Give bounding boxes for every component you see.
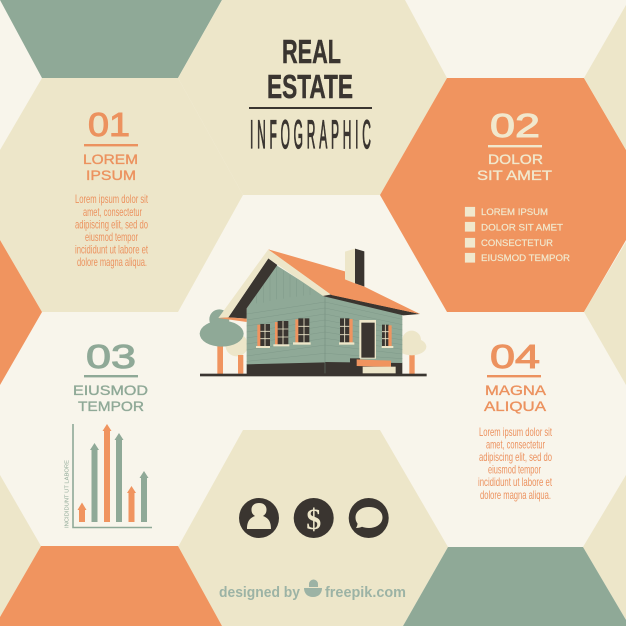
arrow bars: [78, 424, 148, 522]
section 02 checklist: [465, 207, 570, 264]
section 04: 04: [490, 338, 540, 375]
hexagon: bottom centre beige: [178, 430, 448, 626]
chimney: [345, 249, 364, 287]
gable trim: [218, 249, 332, 318]
left windows: [256, 318, 311, 348]
section 02: [465, 107, 570, 264]
roof shadow: [323, 294, 420, 315]
title: [249, 33, 372, 157]
hexagon: bottom left orange: [0, 546, 222, 626]
section 04 paragraph: dolore magna aliqua.: [480, 488, 551, 502]
section 01 paragraph: amet, consectetur: [83, 205, 142, 219]
freepik credit: [219, 580, 406, 601]
section 02 checklist: DOLOR SIT AMET: [481, 222, 563, 234]
icon: person: [239, 498, 279, 538]
icon: freepik logo: [304, 580, 322, 597]
hexagon: left lower beige: [0, 475, 41, 617]
hexagon: title background: [178, 0, 447, 195]
section 01 paragraph: dolore magna aliqua.: [77, 255, 147, 269]
eave: [218, 317, 247, 322]
door: [359, 320, 376, 359]
hexagon: bottom right teal: [403, 547, 626, 626]
steps: [350, 358, 396, 374]
section 01 paragraph: eiusmod tempor: [85, 230, 138, 244]
section 01 paragraph: adipiscing elit, sed do: [75, 218, 148, 232]
walls: [247, 265, 402, 373]
section 02: DOLOR: [488, 151, 543, 167]
right tree: [397, 331, 426, 374]
title: REAL: [282, 33, 341, 70]
freepik credit: freepik.com: [325, 584, 406, 601]
freepik credit: designed by: [219, 584, 301, 601]
hexagon: section 01 background: [0, 78, 243, 312]
roof: [268, 249, 420, 314]
chart axes: [73, 424, 152, 528]
section 04: MAGNA: [485, 382, 547, 398]
hexagon: right lower beige: [583, 475, 626, 620]
house illustration: [200, 249, 427, 376]
foundation: [247, 362, 402, 374]
section 01 paragraph: Lorem ipsum dolor sit: [75, 192, 148, 206]
hexagon: right upper beige: [584, 5, 626, 150]
back tree: [225, 334, 248, 374]
section 02 checklist: CONSECTETUR: [481, 238, 553, 249]
section 04 paragraph: [478, 425, 552, 502]
icon: dollar: [294, 498, 334, 538]
section 04: [478, 338, 552, 502]
section 02 checklist: LOREM IPSUM: [481, 207, 548, 218]
section 02: 02: [490, 107, 540, 144]
ground line: [200, 374, 427, 376]
left tree: [200, 309, 244, 374]
chart axis label: INCIDIDUNT UT LABORE: [64, 460, 70, 528]
section 03: [73, 338, 148, 414]
section 01: 01: [88, 106, 130, 143]
hexagon: left orange: [0, 240, 42, 385]
section 03: 03: [86, 338, 136, 375]
hexagon: right middle beige: [584, 242, 626, 385]
section 04 paragraph: amet, consectetur: [486, 438, 545, 452]
section 01 paragraph: incididunt ut labore et: [75, 242, 148, 256]
section 04 paragraph: incididunt ut labore et: [478, 475, 552, 489]
underside of gable: [228, 258, 277, 319]
hexagon: top left teal: [0, 0, 222, 78]
section 01: LOREM: [83, 151, 138, 167]
section 01: [75, 106, 148, 269]
section 03: EIUSMOD: [73, 382, 148, 398]
right windows: [339, 318, 393, 348]
icon: dollar: $: [306, 503, 321, 536]
icon: speech bubble: [349, 498, 389, 538]
section 01: IPSUM: [86, 167, 136, 183]
title: ESTATE: [267, 68, 353, 105]
section 03: TEMPOR: [78, 398, 144, 414]
hexagon: section 02 background: [380, 78, 626, 312]
section 01 paragraph: [75, 192, 148, 269]
section 02: SIT AMET: [477, 167, 553, 183]
section 04 paragraph: adipiscing elit, sed do: [479, 450, 552, 464]
bar chart: [64, 424, 152, 528]
section 04: ALIQUA: [484, 398, 547, 414]
section 04 paragraph: eiusmod tempor: [488, 462, 541, 476]
title: INFOGRAPHIC: [250, 113, 371, 157]
section 04 paragraph: Lorem ipsum dolor sit: [479, 425, 552, 439]
section 02 checklist: EIUSMOD TEMPOR: [481, 253, 570, 264]
